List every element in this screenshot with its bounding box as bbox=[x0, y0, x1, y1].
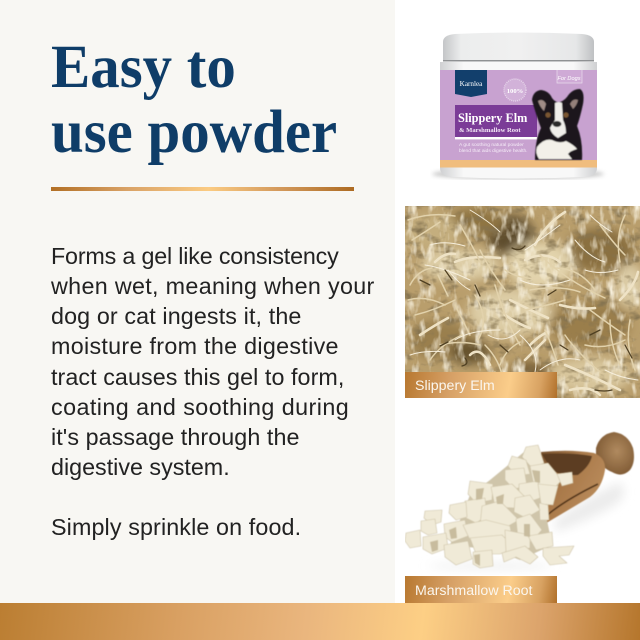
wooden scoop bbox=[536, 432, 634, 522]
shaded fibre mass bbox=[404, 208, 640, 393]
fibres bbox=[408, 210, 638, 395]
gold divider bbox=[51, 187, 354, 191]
body text: when wet, meaning when your bbox=[51, 273, 375, 299]
100% badge bbox=[504, 79, 526, 101]
bottom gold band bbox=[0, 603, 640, 640]
body text: it's passage through the bbox=[51, 424, 300, 450]
body text: coating and soothing during bbox=[51, 394, 349, 420]
product jar bbox=[432, 32, 604, 180]
jar lid bbox=[443, 32, 594, 61]
title bbox=[51, 34, 337, 166]
body text: moisture from the digestive bbox=[51, 333, 339, 359]
for dogs tag: For Dogs bbox=[557, 76, 581, 82]
brand tag: Karnlea bbox=[460, 80, 483, 88]
product name band bbox=[455, 105, 537, 139]
ground shadows bbox=[428, 482, 624, 569]
body text: tract causes this gel to form, bbox=[51, 364, 344, 390]
label: slippery elm: Slippery Elm bbox=[415, 378, 495, 394]
root pieces bbox=[405, 445, 574, 568]
label: slippery elm bbox=[405, 372, 557, 398]
body text: Simply sprinkle on food. bbox=[51, 514, 301, 540]
body text: dog or cat ingests it, the bbox=[51, 303, 301, 329]
title: use powder bbox=[51, 99, 337, 166]
jar body bbox=[440, 62, 597, 178]
brand tag bbox=[455, 70, 487, 97]
jar shadow bbox=[432, 169, 604, 179]
marshmallow root photo bbox=[405, 431, 635, 570]
product description: blend that aids digestive health. bbox=[459, 148, 528, 154]
product description bbox=[459, 142, 528, 154]
fibre texture bbox=[405, 206, 640, 398]
body text: Forms a gel like consistency bbox=[51, 243, 339, 269]
body text bbox=[51, 243, 375, 540]
label: marshmallow root bbox=[405, 576, 557, 603]
for dogs tag bbox=[557, 70, 582, 83]
label: marshmallow root: Marshmallow Root bbox=[415, 583, 532, 599]
dog photo bbox=[532, 89, 584, 160]
left text panel bbox=[0, 0, 395, 603]
product description: A gut soothing natural powder bbox=[459, 142, 524, 148]
title: Easy to bbox=[51, 34, 236, 101]
product name band: & Marshmallow Root bbox=[459, 127, 521, 134]
100% badge: 100% bbox=[507, 88, 523, 95]
product name band: Slippery Elm bbox=[458, 111, 528, 125]
jar label bbox=[440, 70, 597, 160]
slippery elm photo bbox=[405, 206, 640, 398]
body text: digestive system. bbox=[51, 454, 230, 480]
